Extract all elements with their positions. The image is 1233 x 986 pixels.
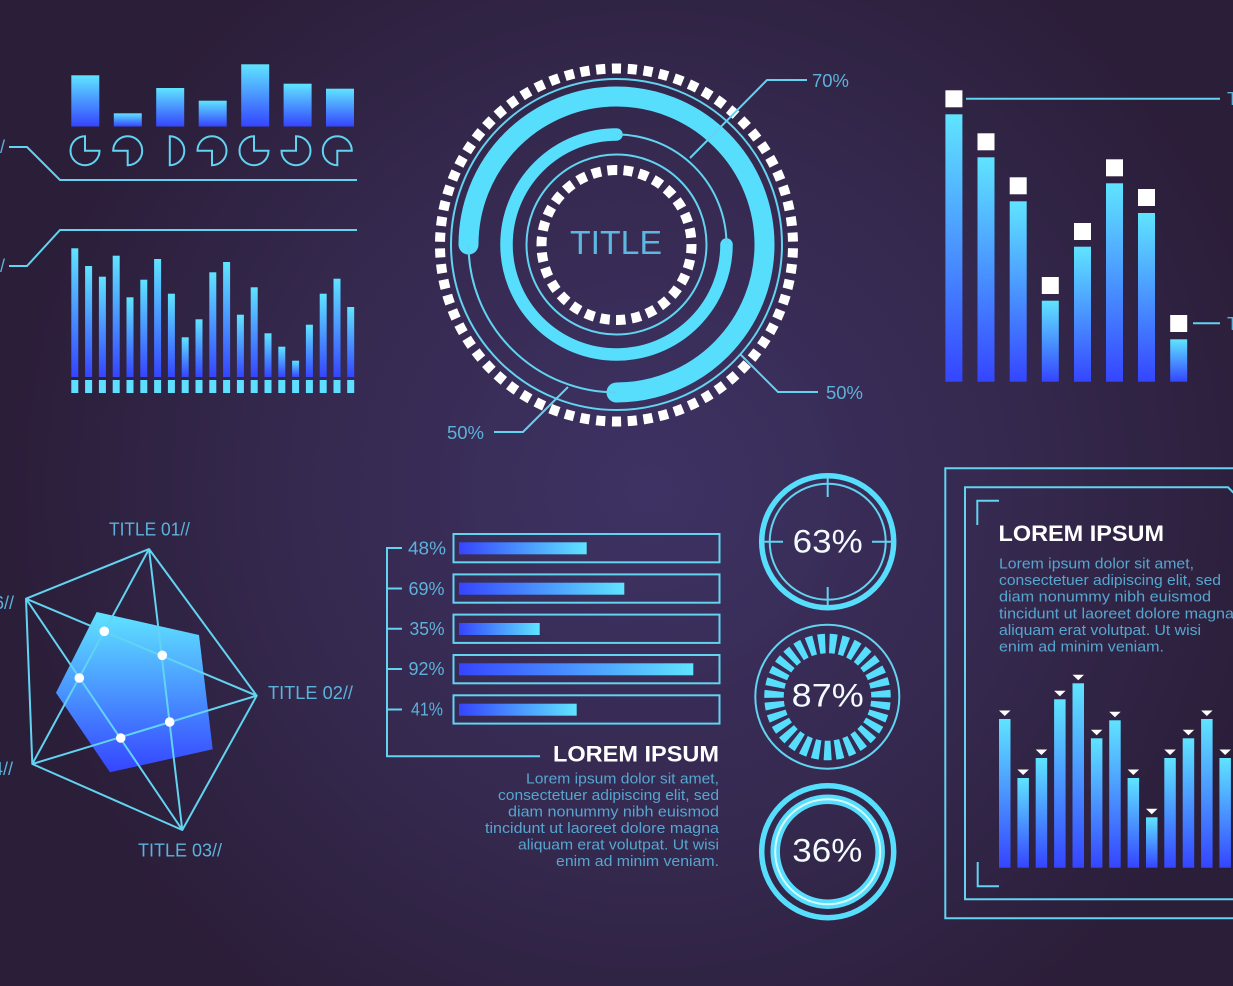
thin arc lower left	[468, 244, 616, 392]
body text: enim ad minim veniam.	[999, 638, 1164, 655]
gauge: 36%	[762, 786, 894, 918]
label 01: TITLE 01//	[109, 519, 190, 539]
bars	[945, 114, 1187, 382]
panel: central radial gauge	[435, 64, 863, 443]
center title: TITLE	[570, 224, 662, 261]
row frames	[454, 534, 720, 724]
outer ring	[762, 786, 894, 918]
tick ring	[771, 640, 884, 754]
inner ring	[770, 484, 886, 600]
value: 36%	[792, 833, 862, 869]
thick arc	[468, 97, 764, 393]
crosshair ticks	[762, 478, 893, 605]
inner frame	[965, 487, 1233, 899]
wireframe	[26, 549, 257, 830]
label 02: TITLE 02//	[268, 683, 353, 703]
outer ring	[762, 476, 894, 608]
inner light ring	[775, 799, 880, 904]
gauge: 63%	[762, 476, 894, 608]
row labels: 41%	[411, 700, 443, 720]
body text: Lorem ipsum dolor sit amet,	[526, 770, 719, 787]
leader top	[966, 98, 1220, 100]
leader line 70%	[690, 80, 807, 158]
leader line: upper	[9, 147, 357, 180]
label left 50%: 50%	[447, 423, 484, 443]
panel: top-right bar chart	[945, 89, 1233, 382]
value: 87%	[792, 678, 864, 714]
panel: horizontal progress bars	[387, 534, 720, 870]
value: 63%	[793, 523, 863, 559]
corner bracket top	[977, 501, 999, 525]
panel: top-left charts	[0, 64, 357, 393]
label 03: TITLE 03//	[138, 841, 222, 861]
white caps	[945, 90, 1187, 332]
panel: right text and chart frame	[945, 468, 1233, 918]
body text: enim ad minim veniam.	[556, 853, 719, 870]
body text: aliquam erat volutpat. Ut wisi	[518, 837, 719, 854]
bar chart	[999, 683, 1231, 868]
outer thin ring	[451, 79, 782, 410]
outer tick ring	[435, 64, 798, 426]
row labels: 92%	[408, 659, 444, 679]
filled polygon	[56, 612, 213, 772]
inner thin ring	[526, 154, 706, 334]
outer ring	[755, 625, 899, 769]
row fills	[459, 542, 693, 716]
row labels: 35%	[410, 619, 444, 639]
body text: aliquam erat volutpat. Ut wisi	[999, 622, 1201, 639]
label 70%: 70%	[812, 71, 849, 91]
row labels: 48%	[408, 538, 446, 558]
body text: consectetuer adipiscing elit, sed	[498, 787, 719, 804]
gauge: 87%	[755, 625, 899, 769]
thin arc upper right	[616, 134, 726, 244]
bracket	[387, 548, 540, 756]
leader line left 50%	[494, 387, 568, 432]
leader line right 50%	[740, 354, 818, 392]
bar chart: thin bars	[71, 248, 354, 377]
inner tick ring	[533, 162, 700, 328]
outer frame	[945, 468, 1233, 918]
heading: LOREM IPSUM	[998, 521, 1164, 546]
bar chart: wide bars	[71, 64, 354, 126]
base squares	[71, 380, 354, 393]
inner thick ring	[775, 799, 880, 904]
body text: tincidunt ut laoreet dolore magna	[485, 820, 720, 837]
bar markers	[999, 675, 1231, 814]
body text: diam nonummy nibh euismod	[999, 589, 1211, 606]
panel: radar chart	[0, 519, 353, 861]
label right 50%: 50%	[826, 383, 863, 403]
icons: pie outlines	[70, 136, 352, 165]
data points	[74, 626, 174, 743]
body text	[999, 555, 1233, 655]
leader line: lower	[9, 230, 357, 266]
body text	[485, 770, 720, 870]
body text: diam nonummy nibh euismod	[508, 804, 719, 821]
row labels: 69%	[408, 579, 444, 599]
body text: consectetuer adipiscing elit, sed	[999, 572, 1221, 589]
corner bracket bottom	[978, 862, 999, 886]
leader bottom	[1193, 322, 1220, 324]
row labels	[408, 538, 446, 720]
heading: LOREM IPSUM	[553, 742, 719, 767]
middle arc	[506, 134, 726, 354]
body text: tincidunt ut laoreet dolore magna	[999, 605, 1233, 622]
body text: Lorem ipsum dolor sit amet,	[999, 555, 1194, 572]
